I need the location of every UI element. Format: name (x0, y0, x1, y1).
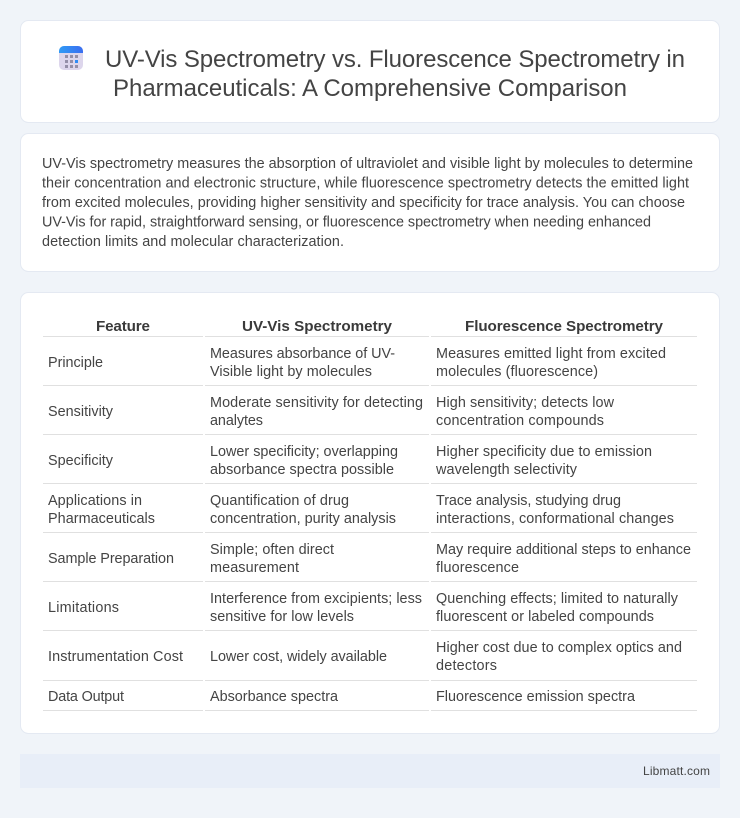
row: specificity: absorbance spectra possible (210, 462, 394, 478)
panel: header (20, 20, 720, 122)
table header: Feature (96, 318, 150, 335)
row: specificity: Lower specificity; overlapping (210, 444, 398, 460)
row: principle: Visible light by molecules (210, 364, 372, 380)
row: sample preparation: fluorescence (436, 560, 519, 576)
row: sensitivity: concentration compounds (436, 413, 604, 429)
panel: introduction text: UV-Vis for rapid, straightforward sensing, or fluorescence spectrometry when needing enhanced (42, 214, 651, 230)
row: sensitivity: High sensitivity; detects low (436, 395, 615, 411)
row: applications in pharmaceuticals: Trace analysis, studying drug (436, 493, 621, 509)
row: sample preparation: measurement (210, 560, 299, 576)
row: applications in pharmaceuticals (48, 493, 674, 527)
row: data output: Data Output (48, 689, 124, 705)
row: instrumentation cost: Instrumentation Cost (48, 649, 183, 665)
row: applications in pharmaceuticals: Pharmaceuticals (48, 511, 155, 527)
row: sensitivity: Moderate sensitivity for detecting (210, 395, 423, 411)
row: limitations: Quenching effects; limited to naturally (436, 591, 679, 607)
row: sensitivity: analytes (210, 413, 263, 429)
icon: calendar (59, 46, 83, 70)
row: instrumentation cost: Higher cost due to complex optics and (436, 640, 682, 656)
row: sample preparation: Sample Preparation (48, 551, 174, 567)
row: instrumentation cost: detectors (436, 658, 497, 674)
panel: introduction text: from excited molecules, providing higher sensitivity and specificity for trace analysis. You can choose (42, 195, 685, 211)
row: data output: Fluorescence emission spectra (436, 689, 635, 705)
row: principle: molecules (fluorescence) (436, 364, 598, 380)
title: Pharmaceuticals: A Comprehensive Comparison (113, 75, 627, 102)
row: principle: Measures emitted light from excited (436, 346, 666, 362)
row: principle (48, 346, 666, 380)
row: sensitivity: Sensitivity (48, 404, 114, 420)
table header: UV-Vis Spectrometry (242, 318, 393, 335)
row: sample preparation: Simple; often direct (210, 542, 334, 558)
title: UV-Vis Spectrometry vs. Fluorescence Spectrometry in (105, 46, 685, 73)
row: specificity: Specificity (48, 453, 114, 469)
title (105, 46, 685, 102)
panel: introduction text: UV-Vis spectrometry measures the absorption of ultraviolet and visible light by molecules to determine (42, 156, 693, 172)
row: limitations: Limitations (48, 600, 119, 616)
row: applications in pharmaceuticals: concentration, purity analysis (210, 511, 396, 527)
table header (96, 318, 664, 335)
row: instrumentation cost (48, 640, 682, 674)
panel: introduction text: their concentration and electronic structure, while fluorescence spectrometry detects the emitted light (42, 176, 689, 192)
row: specificity: wavelength selectivity (435, 462, 578, 478)
row: limitations: fluorescent or labeled compounds (436, 609, 654, 625)
row: sensitivity (48, 395, 615, 429)
row: sample preparation (48, 542, 691, 576)
row: data output (48, 689, 635, 705)
row: applications in pharmaceuticals: Quantification of drug (210, 493, 349, 509)
row: principle: Measures absorbance of UV- (210, 346, 395, 362)
panel: introduction text: detection limits and molecular characterization. (42, 234, 344, 250)
panel: introduction text (20, 134, 720, 272)
row: applications in pharmaceuticals: interactions, conformational changes (436, 511, 674, 527)
footer: Libmatt.com (643, 764, 710, 778)
row: sample preparation: May require additional steps to enhance (436, 542, 691, 558)
row: limitations (48, 591, 679, 625)
row: data output: Absorbance spectra (210, 689, 338, 705)
row: applications in pharmaceuticals: Applications in (48, 493, 142, 509)
row: limitations: Interference from excipients; less (210, 591, 422, 607)
table header: Fluorescence Spectrometry (465, 318, 664, 335)
row: specificity (48, 444, 652, 478)
row: instrumentation cost: Lower cost, widely available (210, 649, 387, 665)
row: principle: Principle (48, 355, 103, 371)
footer (20, 754, 720, 788)
row: limitations: sensitive for low levels (210, 609, 354, 625)
row: specificity: Higher specificity due to emission (436, 444, 652, 460)
panel: comparison table (20, 292, 720, 734)
